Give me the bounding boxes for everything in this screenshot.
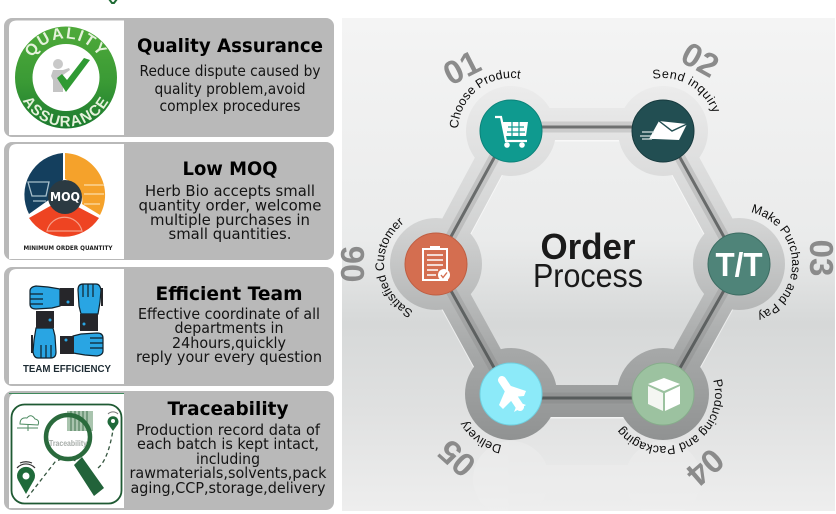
center title: order process: Process: [533, 257, 643, 294]
label 01: choose product: [437, 43, 521, 128]
center title: order process: [533, 226, 643, 294]
heading: traceability: Traceability: [168, 398, 289, 420]
node 06: clipboard: [405, 233, 467, 295]
label 06: satisfied customer: [334, 218, 412, 318]
text: efficient team description: reply your every question: [136, 348, 322, 366]
text: traceability description: [130, 421, 327, 497]
label 06: satisfied customer: Satisfied Customer: [375, 218, 412, 318]
label 02: send inquiry: Send inquiry: [653, 70, 720, 111]
icon: MOQ pie: MINIMUM ORDER QUANTITY: [24, 244, 113, 252]
text: quality assurance description: Reduce dispute caused by: [140, 62, 321, 80]
node 05: airplane: [480, 363, 542, 425]
label 05: delivery: Delivery: [460, 422, 501, 454]
text: traceability description: each batch is kept intact,: [137, 435, 319, 453]
icon: quality assurance badge: QUALITY: [26, 27, 108, 56]
heading: quality assurance: Quality Assurance: [137, 35, 323, 57]
label 04: producing and packaging: 04: [679, 441, 731, 494]
icon: team of four hands: TEAM EFFICIENCY: [23, 364, 111, 375]
label 01: choose product: Choose Product: [450, 70, 521, 128]
heading: efficient team: Efficient Team: [156, 283, 302, 305]
center title: order process: Order: [540, 226, 636, 267]
icon: MOQ pie: [24, 153, 113, 252]
label 03: make purchase and pay: Make Purchase and Pay: [752, 204, 800, 320]
text: low MOQ description: quantity order, welcome: [138, 196, 322, 214]
icon: quality assurance badge: ASSURANCE: [22, 96, 108, 126]
text: efficient team description: departments in: [174, 319, 284, 337]
node 03: T/T: [708, 233, 770, 295]
text: traceability description: including: [196, 450, 260, 468]
icon: quality assurance badge: [15, 26, 117, 128]
text: low MOQ description: multiple purchases in: [150, 211, 310, 229]
panel: traceability: [4, 391, 334, 510]
node 01: cart: [480, 100, 542, 162]
text: traceability description: aging,CCP,storage,delivery: [130, 479, 326, 497]
text: efficient team description: [136, 305, 322, 366]
text: quality assurance description: complex procedures: [160, 97, 301, 115]
node 02: envelope: [632, 100, 694, 162]
text: efficient team description: 24hours,quickly: [172, 334, 286, 352]
cropped heading fragment: [109, 0, 117, 3]
label 02: send inquiry: 02: [675, 34, 725, 85]
text: low MOQ description: small quantities.: [168, 225, 292, 243]
text: low MOQ description: Herb Bio accepts small: [145, 182, 315, 200]
reflection of ring: [473, 441, 701, 514]
icon: MOQ pie: MOQ: [50, 190, 80, 204]
hexagon ring: [390, 86, 785, 440]
panel: quality assurance: [4, 18, 334, 137]
node 04: box: [632, 363, 694, 425]
panel: low MOQ: [4, 142, 334, 260]
node 03: T/T: T/T: [716, 246, 762, 283]
label 05: delivery: [431, 422, 501, 484]
text: traceability description: rawmaterials,solvents,pack: [130, 464, 327, 482]
icon: traceability magnifier: Traceability: [49, 439, 87, 448]
panel: order process: [334, 18, 836, 511]
label 02: send inquiry: [653, 34, 725, 111]
text: traceability description: Production record data of: [136, 421, 321, 439]
text: low MOQ description: [138, 182, 322, 243]
label 01: choose product: 01: [437, 43, 487, 92]
label 04: producing and packaging: Producing and Packaging: [618, 379, 723, 454]
icon: team of four hands: [23, 284, 111, 375]
label 04: producing and packaging: [618, 379, 731, 494]
panel: efficient team: [4, 267, 334, 386]
text: quality assurance description: quality problem,avoid: [154, 80, 306, 98]
icon: traceability magnifier: [12, 404, 122, 504]
text: efficient team description: Effective coordinate of all: [138, 305, 320, 323]
label 05: delivery: 05: [431, 432, 483, 484]
heading: low MOQ: Low MOQ: [182, 158, 278, 180]
label 03: make purchase and pay: [752, 204, 836, 320]
text: quality assurance description: [140, 62, 321, 115]
label 06: satisfied customer: 06: [334, 246, 371, 282]
